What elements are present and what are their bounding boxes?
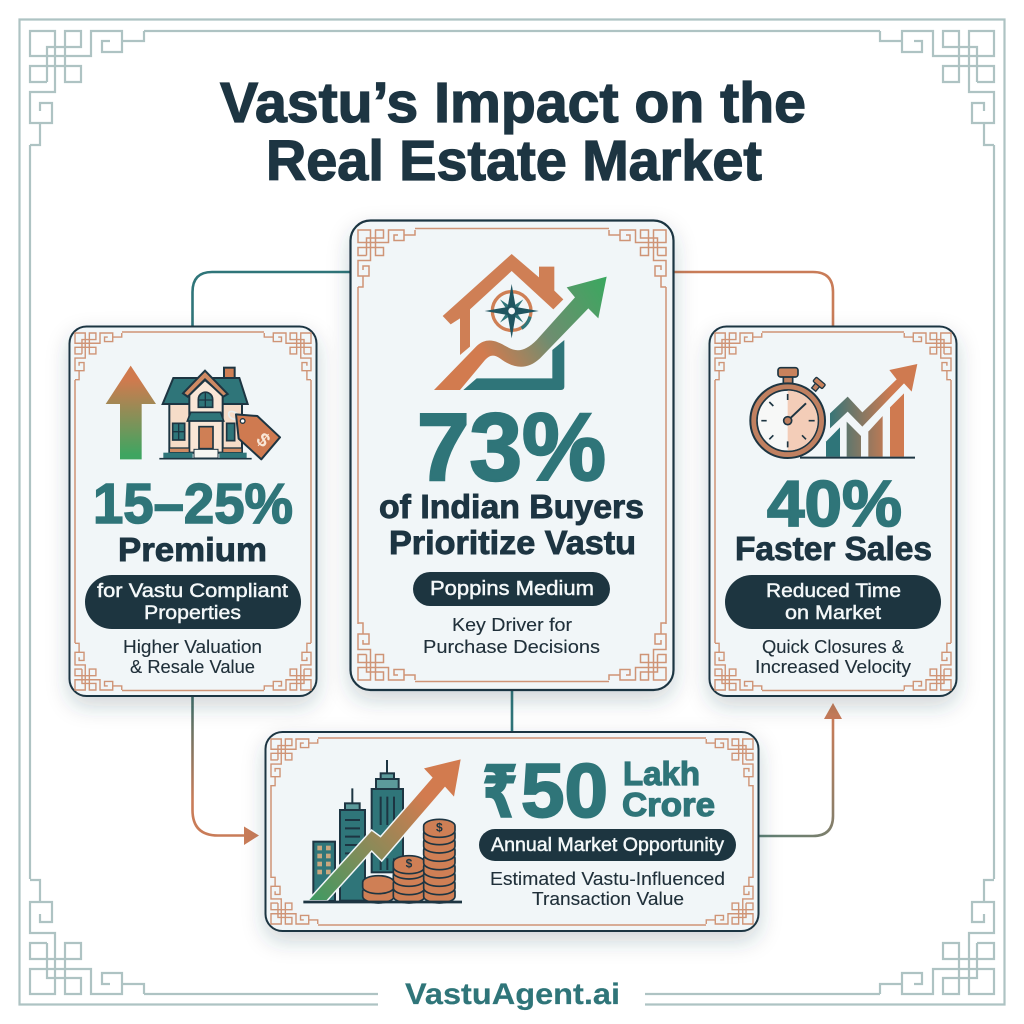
icon: city skyline, arrow and coin stacks	[303, 759, 462, 903]
footer brand: VastuAgent.ai	[405, 978, 620, 1011]
caption: key driver: Key Driver for	[452, 614, 572, 635]
stat: rupee 50 lakh crore	[482, 749, 715, 834]
panel: right card faster sales	[710, 326, 956, 696]
icon: city skyline, arrow and coin stacks: $	[436, 820, 443, 834]
caption: higher valuation: Higher Valuation	[123, 636, 262, 657]
panel: center card 73%	[350, 220, 674, 690]
caption: estimated transaction value: Transaction Value	[532, 888, 684, 909]
pill: for Vastu compliant properties: Properties	[144, 602, 241, 624]
pill: Poppins Medium: Poppins Medium	[430, 578, 594, 600]
heading: of Indian buyers prioritize Vastu	[379, 488, 644, 561]
stat: 40%: 40%	[767, 467, 902, 540]
title	[220, 71, 806, 193]
icon: stopwatch and rising bars	[750, 364, 917, 458]
icon: rising arrow, house and price tag	[106, 366, 280, 459]
stat: rupee 50 lakh crore: ₹	[482, 750, 518, 834]
connector arrows	[192, 272, 842, 845]
caption: quick closures	[755, 636, 912, 677]
caption: key driver: Purchase Decisions	[423, 636, 600, 657]
pill: reduced time on market: on Market	[785, 602, 882, 624]
caption: estimated transaction value	[490, 868, 725, 909]
pill: annual market opportunity: Annual Market Opportunity	[491, 835, 725, 856]
pill: reduced time on market	[725, 575, 941, 629]
panel: bottom card market opportunity	[266, 732, 758, 931]
heading: of Indian buyers prioritize Vastu: of Indian Buyers	[379, 488, 644, 525]
stat: 73%: 73%	[417, 394, 606, 501]
stat: rupee 50 lakh crore: Lakh	[623, 755, 700, 792]
icon: rising arrow, house and price tag: $	[252, 429, 274, 452]
icon: house with compass and rising arrow	[434, 254, 607, 390]
caption: higher valuation	[123, 636, 262, 677]
caption: quick closures: Quick Closures &	[762, 636, 905, 657]
pill: Poppins Medium	[413, 572, 610, 606]
stat: rupee 50 lakh crore: 50	[521, 749, 608, 834]
stat: rupee 50 lakh crore: Crore	[622, 786, 715, 823]
heading: faster sales: Faster Sales	[735, 530, 932, 567]
panel: left card premium	[70, 326, 316, 696]
heading: of Indian buyers prioritize Vastu: Prioritize Vastu	[389, 524, 636, 561]
pill: for Vastu compliant properties: for Vastu Compliant	[97, 580, 289, 602]
caption: quick closures: Increased Velocity	[755, 656, 912, 677]
caption: estimated transaction value: Estimated Vastu-Influenced	[490, 868, 725, 889]
stat: 15-25%: 15–25%	[93, 472, 293, 536]
pill: reduced time on market: Reduced Time	[766, 580, 901, 602]
pill: for Vastu compliant properties	[85, 575, 301, 629]
title: Vastu’s Impact on the	[220, 71, 806, 135]
title: Real Estate Market	[266, 129, 762, 193]
icon: city skyline, arrow and coin stacks: $	[406, 857, 413, 871]
heading: premium: Premium	[118, 531, 267, 568]
caption: key driver	[423, 614, 600, 657]
pill: annual market opportunity	[479, 829, 736, 861]
caption: higher valuation: & Resale Value	[130, 656, 255, 677]
